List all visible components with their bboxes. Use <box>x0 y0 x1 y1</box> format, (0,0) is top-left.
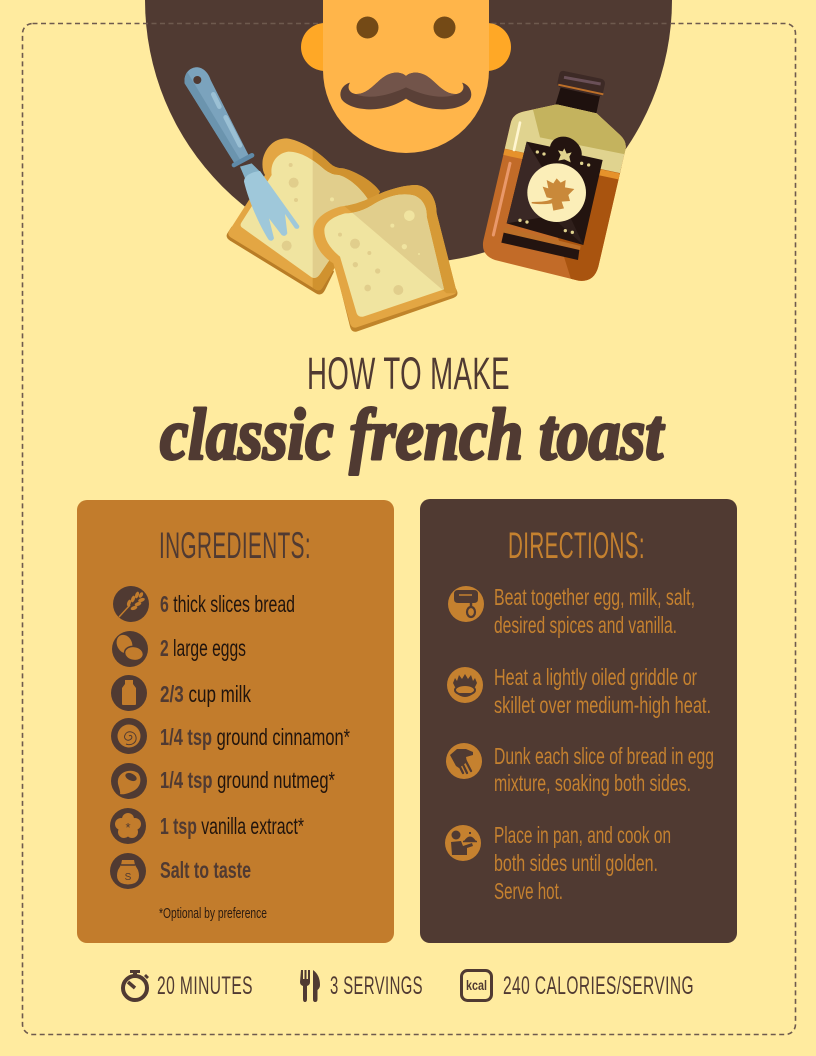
ingredient: cinnamon: 1/4 tsp ground cinnamon* <box>160 724 350 750</box>
step 1: Beat together egg, milk, salt, <box>494 584 695 610</box>
ingredient: vanilla <box>110 808 304 844</box>
illustration: chef, fork, toast and syrup <box>184 0 637 332</box>
step 4 <box>445 822 671 904</box>
ingredients heading: INGREDIENTS: <box>159 525 311 566</box>
ingredient: vanilla: 1 tsp vanilla extract* <box>160 813 304 839</box>
stat: time: 20 MINUTES <box>157 972 253 1000</box>
chef face <box>301 0 511 153</box>
title <box>160 348 665 475</box>
step 1: desired spices and vanilla. <box>494 612 677 638</box>
step 3: mixture, soaking both sides. <box>494 770 691 796</box>
panel: ingredients <box>77 500 394 943</box>
toast slice back <box>227 138 380 294</box>
title line: how to make: HOW TO MAKE <box>307 348 510 399</box>
ingredient: vanilla: * <box>125 820 131 835</box>
step 2: skillet over medium-high heat. <box>494 692 711 718</box>
footnote: *Optional by preference <box>159 906 267 922</box>
ingredient: milk <box>111 675 251 711</box>
ingredient: milk: 2/3 cup milk <box>160 681 251 707</box>
chef head background circle <box>145 0 672 264</box>
footer stats <box>123 970 694 1002</box>
title line: classic french toast: classic french toast <box>160 394 665 475</box>
step 4: Serve hot. <box>494 878 563 904</box>
directions heading: DIRECTIONS: <box>508 525 645 566</box>
ingredient: bread <box>113 586 295 622</box>
step 2 <box>447 664 711 718</box>
ingredient: salt: S <box>125 872 132 883</box>
syrup bottle <box>482 71 626 281</box>
toast slice front <box>313 185 457 332</box>
ingredient: nutmeg: 1/4 tsp ground nutmeg* <box>160 767 335 793</box>
panel: directions <box>420 499 737 943</box>
ingredient: salt: Salt to taste <box>160 857 251 883</box>
stat: calories <box>462 970 694 1000</box>
step 3 <box>446 743 714 796</box>
stat: time <box>123 970 253 1000</box>
stat: servings <box>300 970 423 1002</box>
step 3: Dunk each slice of bread in egg <box>494 743 714 769</box>
step 1 <box>448 584 695 638</box>
stat: calories: 240 CALORIES/SERVING <box>503 972 694 1000</box>
ingredient: nutmeg <box>111 763 335 799</box>
step 4: both sides until golden. <box>494 850 658 876</box>
stat: servings: 3 SERVINGS <box>330 972 423 1000</box>
ingredient: bread: 6 thick slices bread <box>160 591 295 617</box>
step 2: Heat a lightly oiled griddle or <box>494 664 697 690</box>
ingredient: salt <box>110 853 251 889</box>
ingredient: eggs <box>112 631 246 667</box>
step 4: Place in pan, and cook on <box>494 822 671 848</box>
ingredient: cinnamon <box>111 718 350 754</box>
fork <box>184 67 299 241</box>
stat: calories: kcal <box>466 977 487 993</box>
ingredient: eggs: 2 large eggs <box>160 635 246 661</box>
